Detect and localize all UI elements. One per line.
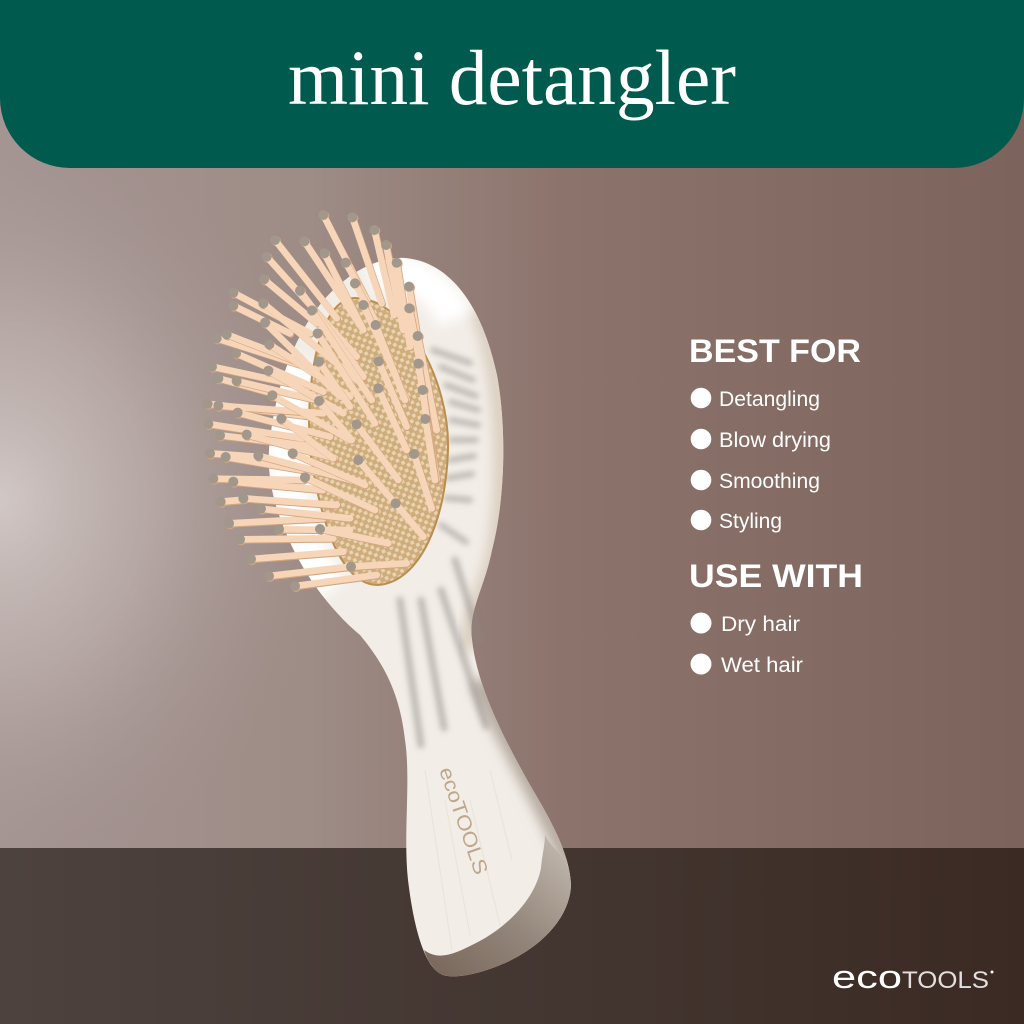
title: mini detangler	[288, 34, 736, 121]
item: dry hair: Dry hair	[721, 613, 800, 636]
heading: best for: BEST FOR	[689, 333, 861, 369]
item: dry hair	[690, 612, 800, 636]
bristle cushion	[309, 298, 448, 585]
item: styling	[691, 510, 782, 533]
item: blow drying: Blow drying	[719, 429, 831, 452]
brush	[208, 215, 580, 985]
brush body	[260, 250, 580, 985]
item: styling: Styling	[719, 510, 782, 533]
best for list	[689, 333, 861, 533]
handle end rim	[424, 835, 572, 978]
brand logo	[832, 959, 994, 995]
table surface	[0, 848, 1024, 1024]
engraved brush logo: ecoTOOLS	[434, 764, 492, 878]
use with list	[689, 558, 863, 677]
header banner	[0, 0, 1024, 168]
wood grain and pin shadows	[400, 350, 512, 950]
brand logo: eco	[832, 959, 902, 995]
brand logo: TOOLS	[902, 967, 989, 994]
item: smoothing: Smoothing	[719, 470, 820, 493]
item: wet hair	[690, 654, 803, 677]
item: wet hair: Wet hair	[721, 654, 803, 677]
item: detangling: Detangling	[719, 388, 820, 411]
bristle pins	[208, 215, 437, 586]
heading: use with: USE WITH	[689, 558, 863, 594]
